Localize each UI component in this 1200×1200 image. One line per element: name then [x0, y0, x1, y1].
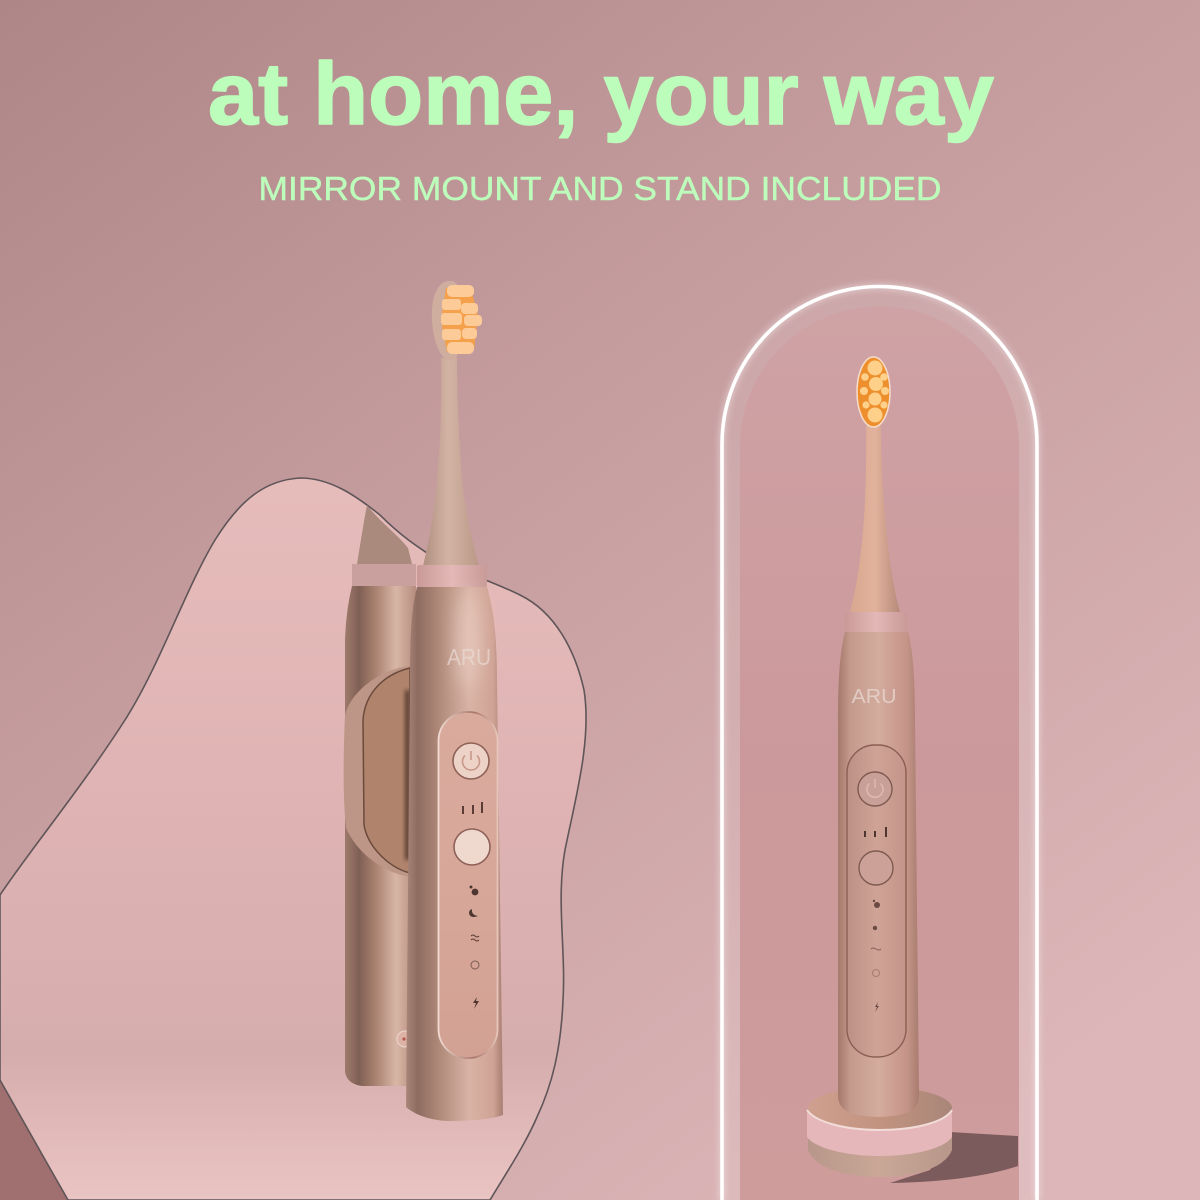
stand toothbrush	[838, 357, 919, 1117]
collar	[845, 612, 907, 633]
mirror	[0, 478, 586, 1200]
arch outer tint	[722, 286, 1037, 1200]
panel: stand arch	[722, 286, 1037, 1200]
power button	[453, 743, 489, 779]
panel: mirror with mount	[0, 478, 586, 1200]
handle shine	[457, 590, 479, 690]
mode button	[859, 851, 893, 885]
control panel	[438, 712, 498, 1058]
intensity bars	[463, 802, 482, 814]
mode icons	[469, 886, 479, 1009]
logo: ARU	[852, 686, 896, 708]
mode button	[454, 829, 490, 865]
orange bristles	[441, 285, 482, 354]
mode icons	[871, 900, 881, 1012]
arch outline	[722, 286, 1037, 1200]
panel: toothbrush front	[406, 281, 503, 1121]
brush head	[432, 281, 459, 361]
power button	[858, 772, 892, 806]
brush neck	[423, 358, 479, 566]
power icon	[867, 779, 883, 797]
head	[857, 357, 890, 427]
handle	[838, 632, 919, 1117]
title: at home, your way	[208, 44, 994, 143]
arch glow	[722, 286, 1037, 1200]
mirror shadow corner	[0, 1080, 68, 1200]
bristles	[860, 360, 889, 422]
power icon	[462, 751, 480, 770]
brand logo: ARU	[447, 644, 491, 670]
handle	[406, 587, 503, 1121]
arch interior	[740, 306, 1019, 1200]
charging stand	[807, 1087, 952, 1177]
control panel	[847, 745, 906, 1057]
subtitle: MIRROR MOUNT AND STAND INCLUDED	[258, 170, 942, 207]
reflected toothbrush	[345, 505, 416, 1086]
collar	[417, 565, 487, 587]
neck	[850, 426, 900, 612]
mirror mount bracket	[344, 666, 410, 877]
stand shadow	[890, 1132, 1018, 1183]
bars	[865, 827, 886, 837]
